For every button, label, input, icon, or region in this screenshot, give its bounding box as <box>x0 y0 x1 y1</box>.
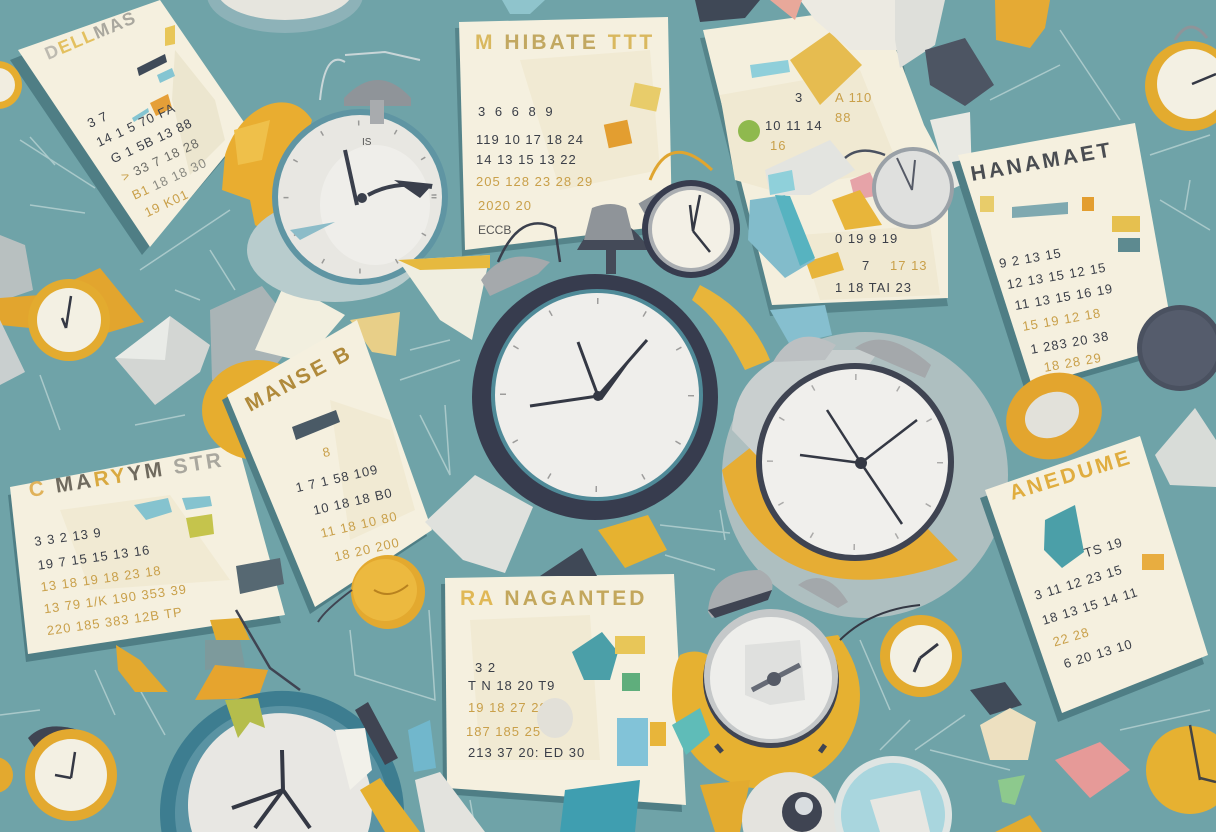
calendar: bottom center: T N 18 20 T9 <box>468 678 555 693</box>
clock: top left: IS <box>362 137 372 148</box>
calendar numbers: 17 13 <box>890 258 928 273</box>
calendar numbers: 3 7 <box>85 108 110 131</box>
calendar: right: 1 283 20 38 <box>1029 328 1110 357</box>
alarm clock: right large <box>722 305 1008 618</box>
crumpled paper: left <box>0 235 400 405</box>
calendar: mid left: 13 79 1/K 190 353 39 <box>43 581 188 616</box>
small clock: bottom right corner <box>1146 725 1216 814</box>
calendar: bottom center: 3 2 <box>475 660 496 675</box>
calendar: top center <box>455 17 672 256</box>
calendar numbers: B1 18 18 30 <box>129 155 209 203</box>
calendar numbers: 88 <box>835 110 851 125</box>
calendar: center left: 18 20 200 <box>333 535 401 564</box>
calendar: mid left: 3 3 2 13 9 <box>33 525 103 549</box>
calendar: bottom right: 6 20 13 10 <box>1062 636 1134 671</box>
calendar numbers <box>85 77 221 226</box>
calendar: right: 18 28 29 <box>1043 350 1103 375</box>
alarm clock: upper right <box>748 140 954 278</box>
small clock: top right <box>1145 27 1216 131</box>
calendar numbers: 10 11 14 <box>765 118 823 133</box>
calendar: bottom right: TS 19 <box>1082 535 1125 560</box>
alarm clock: bottom left large <box>160 691 485 832</box>
mustard smiley clock <box>318 555 425 629</box>
calendar numbers: G 1 5B 13 88 <box>108 115 195 166</box>
calendar: bottom center: 213 37 20: ED 30 <box>468 745 585 760</box>
alarm clock: bottom left small <box>0 726 117 821</box>
clock: top left <box>222 52 448 302</box>
crumpled paper and shapes: top <box>502 0 1050 190</box>
calendar numbers <box>765 90 928 295</box>
calendar: top center: 3 6 6 8 9 <box>478 104 556 119</box>
calendar: mid left <box>8 444 285 662</box>
small clock: top <box>207 0 363 33</box>
calendar: right <box>952 123 1175 394</box>
alarm clock: bottom center <box>672 570 920 789</box>
calendar: bottom right: 18 13 15 14 11 <box>1040 584 1140 628</box>
calendar: mid left: 19 7 15 15 13 16 <box>37 542 151 573</box>
calendar numbers: 7 <box>862 258 870 273</box>
calendar: bottom right: 3 11 12 23 15 <box>1032 562 1124 603</box>
calendar: center left: 1 7 1 58 109 <box>294 462 380 495</box>
heading: DELLMAS <box>42 7 139 64</box>
calendar numbers: A 110 <box>835 90 872 105</box>
right small clock: dark <box>1137 305 1216 391</box>
calendar: mid left: 220 185 383 12B TP <box>46 604 184 638</box>
crumpled paper and shapes: center bottom <box>425 475 667 576</box>
calendar: center left: 8 <box>321 444 332 460</box>
calendar: center left: 11 18 10 80 <box>319 508 399 541</box>
calendar: right: 15 19 12 18 <box>1021 305 1102 334</box>
calendar: top center: 205 128 23 28 29 <box>476 174 593 189</box>
heading: HANAMAET <box>969 138 1115 186</box>
calendar numbers: 1 18 TAI 23 <box>835 280 912 295</box>
calendar numbers: 14 1 5 70 FA <box>94 100 178 150</box>
small shapes: bottom right <box>970 682 1130 805</box>
calendar: right: 12 13 15 12 15 <box>1006 260 1107 292</box>
heading: M HIBATE TTT <box>475 31 655 54</box>
small clock: right orange <box>992 357 1116 475</box>
calendar: bottom center: 19 18 27 28 <box>468 700 548 715</box>
calendar: top center: 2020 20 <box>478 198 532 213</box>
calendar: mid left: 13 18 19 18 23 18 <box>40 563 162 595</box>
small clock: left <box>0 268 144 385</box>
calendar numbers: 16 <box>770 138 786 153</box>
calendar: top center: 14 13 15 13 22 <box>476 152 577 167</box>
calendar: top center: ECCB <box>478 223 511 237</box>
calendar numbers: 19 K01 <box>142 186 191 220</box>
calendar: top right center <box>700 6 948 316</box>
calendar: center left <box>202 320 432 614</box>
small clock: bottom right center <box>880 615 962 697</box>
calendar: center left: 10 18 18 B0 <box>312 485 394 518</box>
calendar: right: 9 2 13 15 <box>998 245 1063 271</box>
heading: MANSE B <box>242 341 356 416</box>
calendar numbers: 0 19 9 19 <box>835 231 898 246</box>
small clock: top left corner <box>0 61 22 109</box>
heading: ANEDUME <box>1007 446 1135 505</box>
calendar: right: 11 13 15 16 19 <box>1013 281 1114 313</box>
calendar: bottom right <box>980 408 1216 722</box>
bottom center shapes and clocks <box>560 756 1042 832</box>
calendar: bottom right: 22 28 <box>1051 624 1091 650</box>
small clock: top center <box>639 152 740 278</box>
calendar: top center: 119 10 17 18 24 <box>476 132 584 147</box>
alarm clock: center <box>398 204 770 520</box>
calendar numbers: > 33 7 18 28 <box>119 135 202 184</box>
calendar: top left <box>10 0 248 255</box>
calendar: bottom center: 187 185 25 35 <box>466 724 562 739</box>
heading: C MARYYM STR <box>27 448 226 502</box>
calendar: bottom center <box>441 574 686 812</box>
yellow ribbons: bottom left <box>116 610 300 700</box>
calendar numbers: 3 <box>795 90 803 105</box>
heading: RA NAGANTED <box>460 587 647 610</box>
